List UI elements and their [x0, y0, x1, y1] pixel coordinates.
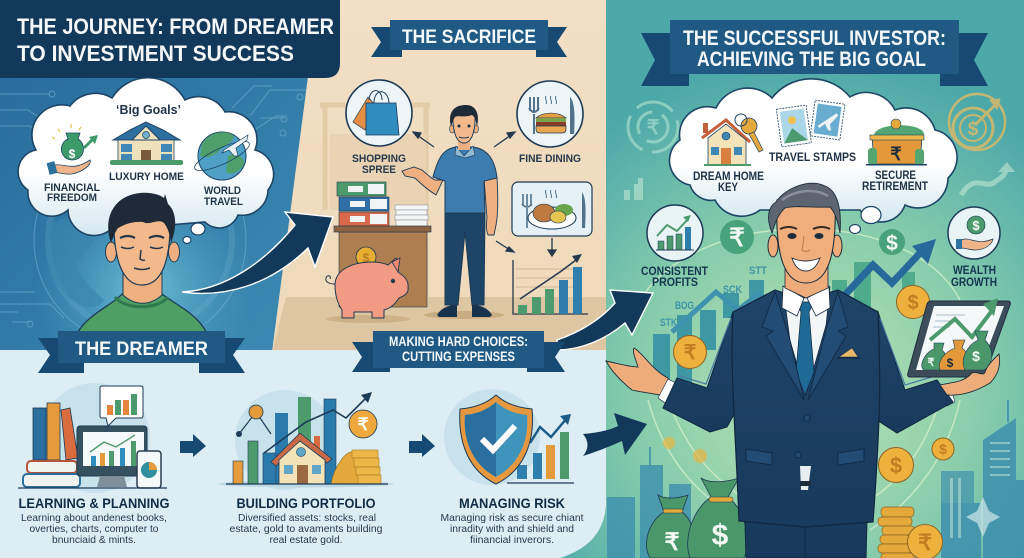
faded dollar target icon: $ — [968, 119, 979, 140]
sacrifice labels: FINE DINING — [519, 153, 581, 165]
faint coins — [663, 437, 707, 463]
arrow: dreamer to sacrifice — [182, 212, 333, 293]
icon: tablet with bags: $ — [972, 348, 980, 364]
thought cloud: investor goals — [669, 79, 957, 222]
hair — [769, 183, 840, 233]
icon: luxury home — [110, 122, 183, 165]
icon: simple meal plate — [512, 182, 592, 236]
icon: green rupee badge — [720, 220, 754, 254]
icon: green dollar badge: $ — [886, 232, 898, 255]
icon: financial freedom — [47, 124, 98, 175]
banner: making hard choices: MAKING HARD CHOICES: — [389, 334, 528, 349]
faded dollar target icon — [949, 94, 1005, 150]
desk — [334, 226, 431, 307]
lapels — [762, 292, 804, 400]
shirt and tie — [783, 287, 830, 395]
banner: the dreamer: THE DREAMER — [75, 339, 208, 360]
step text: managing risk: Managing risk as secure chiant — [440, 512, 584, 524]
step text: building portfolio — [230, 495, 383, 546]
banner: making hard choices: CUTTING EXPENSES — [402, 349, 515, 364]
icon: consistent profits — [647, 205, 703, 261]
money bags — [646, 478, 747, 558]
money bags: $ — [712, 519, 729, 552]
coins around investor: $ — [890, 453, 902, 478]
belt gap — [800, 466, 811, 490]
banner: successful investor: THE SUCCESSFUL INVESTOR: — [683, 27, 946, 50]
trend arrow behind investor — [842, 239, 936, 298]
figure: the saver — [402, 105, 504, 319]
panel: dreamer background — [0, 0, 330, 352]
right sleeve — [863, 312, 955, 433]
thought cloud: big goals — [18, 78, 274, 236]
arrow: step one to two — [180, 434, 206, 457]
thought bubbles: dreamer — [183, 223, 205, 244]
investor labels: WEALTH — [953, 265, 996, 277]
arrow: sacrifice to investor — [557, 290, 653, 350]
chart: growth from savings — [513, 254, 588, 314]
icon: world travel globe — [191, 132, 253, 180]
icon: fine dining — [517, 81, 583, 147]
jacket pockets and buttons — [746, 415, 864, 465]
step text: learning and planning — [18, 495, 170, 546]
icon: tablet with bags: $ — [947, 356, 954, 370]
icon: financial freedom: $ — [69, 147, 76, 161]
money bags: ₹ — [664, 529, 680, 556]
banner: making hard choices — [352, 331, 565, 372]
cloud labels: LUXURY HOME — [109, 171, 184, 183]
cloud labels: TRAVEL — [204, 196, 243, 208]
right hand holding tablet — [940, 354, 1000, 395]
panel: investor background — [560, 0, 1024, 558]
step icon: learning and planning — [18, 383, 167, 493]
investor labels: CONSISTENT — [641, 266, 708, 278]
background chart bars: BOG — [675, 300, 694, 312]
cloud labels: RETIREMENT — [862, 181, 928, 193]
step text: managing risk: MANAGING RISK — [459, 495, 565, 511]
step text: learning and planning: overties, charts, computer to — [30, 523, 159, 535]
pocket square — [839, 348, 858, 357]
left buildings — [607, 447, 691, 558]
banner: the sacrifice — [371, 20, 567, 57]
icon: piggy bank — [326, 247, 410, 323]
icon: shopping spree — [346, 80, 412, 146]
figure: the successful investor — [606, 183, 955, 558]
panel: bottom steps background — [0, 350, 608, 558]
faded rupee ring icon — [628, 102, 678, 152]
small arrows around figure — [413, 132, 515, 252]
cloud labels: KEY — [718, 182, 738, 194]
coin stack: ₹ — [918, 530, 932, 555]
background chart bars: STK — [660, 317, 677, 329]
icon: travel stamps — [776, 100, 845, 147]
icon: wealth growth: $ — [972, 218, 980, 233]
step text: learning and planning: bnunciaid & mints. — [52, 534, 136, 546]
investor labels: GROWTH — [951, 277, 997, 289]
step text: managing risk — [440, 495, 584, 546]
cloud labels: DREAM HOME — [693, 171, 764, 183]
trousers — [745, 520, 867, 558]
coins around investor — [674, 286, 954, 482]
cloud labels: FREEDOM — [47, 192, 97, 204]
jacket — [732, 290, 880, 527]
step text: learning and planning: LEARNING & PLANNING — [18, 495, 170, 511]
icon: secure retirement: ₹ — [890, 144, 902, 164]
investor labels: PROFITS — [652, 277, 698, 289]
banner: successful investor: ACHIEVING THE BIG GOAL — [697, 48, 926, 71]
step icon: managing risk — [444, 389, 574, 485]
step text: managing risk: inradity with and shield and — [450, 523, 574, 535]
left sleeve and hand — [606, 312, 746, 432]
cloud labels: FINANCIAL — [44, 182, 100, 194]
step icon: building portfolio — [218, 390, 394, 490]
icon: green rupee badge: ₹ — [729, 224, 745, 252]
arrow: down to chart — [548, 238, 556, 256]
step text: building portfolio: estate, gold to avaments building — [230, 523, 383, 535]
banner: the sacrifice: THE SACRIFICE — [402, 27, 536, 48]
cloud labels — [693, 152, 928, 194]
cloud labels: SECURE — [875, 170, 916, 182]
icon: wealth growth — [948, 207, 1000, 259]
banner: successful investor — [641, 20, 988, 86]
sacrifice labels: SHOPPING — [352, 153, 406, 165]
step icon: building portfolio: ₹ — [358, 415, 369, 434]
arrow: step two to three — [409, 434, 435, 457]
ears — [768, 235, 778, 257]
face — [777, 200, 835, 283]
step text: building portfolio: real estate gold. — [270, 534, 342, 546]
cloud labels: WORLD — [204, 185, 241, 197]
title header: TO INVESTMENT SUCCESS — [17, 41, 294, 66]
icon: tablet with bags: ₹ — [928, 357, 934, 369]
coin stack — [878, 507, 942, 558]
cloud heading: ‘Big Goals’ — [116, 103, 181, 117]
coins around investor: ₹ — [684, 342, 697, 364]
right buildings — [941, 400, 1024, 558]
sacrifice labels: SPREE — [362, 164, 396, 176]
icon: green dollar badge — [879, 229, 905, 255]
background chart bars — [653, 262, 915, 394]
step text: building portfolio: Diversified assets: stocks, real — [238, 512, 376, 524]
icon: piggy bank: $ — [363, 251, 370, 265]
cloud labels — [44, 171, 243, 208]
background chart bars: SCK — [723, 284, 742, 296]
coins around investor: $ — [907, 292, 919, 314]
icon: tablet with bags — [908, 298, 1010, 377]
panel: sacrifice background — [272, 0, 607, 352]
banner: the dreamer — [38, 331, 245, 373]
icon: dream home and key — [702, 114, 763, 166]
title header: THE JOURNEY: FROM DREAMER — [17, 14, 334, 39]
faded bars and arrow — [624, 162, 1015, 200]
step text: building portfolio: BUILDING PORTFOLIO — [236, 495, 376, 511]
faded rupee ring icon: ₹ — [647, 117, 660, 139]
sparkle — [966, 497, 1000, 537]
sacrifice labels — [352, 153, 581, 176]
coins around investor: $ — [939, 441, 947, 457]
binders and paper on desk — [337, 182, 428, 226]
step text: learning and planning: Learning about andenest books, — [21, 512, 167, 524]
investor labels — [641, 265, 997, 289]
thought bubbles: investor — [850, 206, 881, 234]
eyes brows smile — [780, 227, 830, 271]
neck — [785, 262, 828, 298]
step text: managing risk: fiinancial inverors. — [470, 534, 554, 546]
title header — [0, 0, 340, 78]
icon: secure retirement — [866, 119, 927, 166]
arrow: steps to investor — [583, 413, 647, 456]
figure: the dreamer — [72, 193, 212, 350]
cloud labels: TRAVEL STAMPS — [769, 152, 856, 164]
background chart bars: STT — [749, 265, 767, 277]
